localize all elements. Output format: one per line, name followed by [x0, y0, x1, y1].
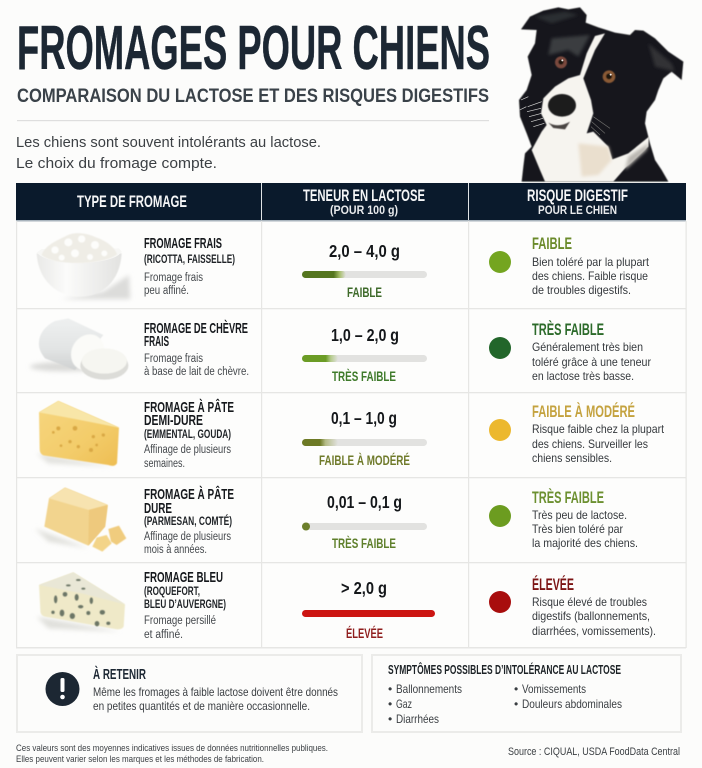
comparison table — [16, 183, 687, 648]
risk: très faible: Très bien toléré par — [532, 522, 623, 536]
lactose: 2,0-4,0 g: FAIBLE — [347, 284, 382, 300]
row: fromage de chèvre frais — [30, 318, 651, 384]
text: fromage de chèvre: FROMAGE DE CHÈVRE — [144, 320, 248, 337]
text: pâte dure: mois à années. — [144, 544, 207, 556]
row: fromage frais — [37, 233, 650, 300]
risk: élevée: Risque élevé de troubles — [532, 595, 647, 609]
risk: faible à modéré: Risque faible chez la plupart — [532, 422, 665, 436]
row: fromage bleu — [37, 569, 656, 641]
risk: très faible — [489, 488, 638, 550]
lactose: > 2,0 g — [302, 578, 435, 641]
intro text: Les chiens sont souvent intolérants au lactose. — [16, 134, 321, 151]
list: symptômes: • — [514, 697, 518, 711]
lactose: 1,0-2,0 g: 1,0 – 2,0 g — [331, 325, 399, 345]
intro text — [16, 134, 321, 172]
text: fromage frais — [144, 235, 235, 297]
risk: faible: FAIBLE — [532, 234, 572, 253]
text: fromage de chèvre: Fromage frais — [144, 353, 203, 365]
lactose: 0,01-0,1 g: TRÈS FAIBLE — [332, 535, 396, 551]
risk: faible — [489, 234, 650, 297]
footnote: Elles peuvent varier selon les marques et les méthodes de fabrication. — [16, 754, 264, 765]
risk: faible à modéré — [489, 402, 665, 465]
risk: très faible: TRÈS FAIBLE — [532, 320, 604, 339]
image: hard cheese block with crumbs — [35, 488, 126, 552]
list: symptômes — [388, 682, 622, 726]
lactose: 0,1-1,0 g — [302, 408, 427, 468]
risk: élevée: diarrhées, vomissements). — [532, 624, 656, 638]
risk: élevée: ÉLEVÉE — [532, 575, 574, 594]
image: goat cheese log — [30, 318, 128, 380]
risk: faible: des chiens. Faible risque — [532, 269, 648, 283]
text: fromage de chèvre — [144, 320, 249, 378]
table header: risque digestif: RISQUE DIGESTIF — [527, 186, 628, 205]
list: symptômes: Vomissements — [522, 682, 586, 696]
subtitle: COMPARAISON DU LACTOSE ET DES RISQUES DIGESTIFS — [17, 86, 489, 107]
image: bowl of fresh cheese — [37, 233, 130, 299]
panel: à retenir — [17, 655, 362, 732]
text: pâte demi-dure: DEMI-DURE — [144, 412, 203, 429]
risk: faible: de troubles digestifs. — [532, 283, 631, 297]
illustration: border collie dog — [519, 7, 683, 182]
footnote: Ces valeurs sont des moyennes indicatives issues de données nutritionnelles publiques. — [16, 743, 328, 754]
text: pâte dure: Affinage de plusieurs — [144, 531, 231, 543]
risk: très faible: Généralement très bien — [532, 340, 643, 354]
table header: teneur en lactose: TENEUR EN LACTOSE — [303, 186, 425, 205]
text: fromage bleu: (ROQUEFORT, — [144, 586, 200, 598]
text: fromage frais: peu affiné. — [144, 285, 189, 297]
risk: faible à modéré: FAIBLE À MODÉRÉ — [532, 402, 635, 421]
risk: très faible: Très peu de lactose. — [532, 508, 627, 522]
lactose: 0,1-1,0 g: 0,1 – 1,0 g — [331, 408, 397, 428]
lactose: 0,01-0,1 g: 0,01 – 0,1 g — [327, 492, 402, 512]
eyes — [555, 56, 615, 83]
lactose: 1,0-2,0 g — [302, 325, 427, 384]
lactose: 1,0-2,0 g: TRÈS FAIBLE — [332, 368, 396, 384]
list: symptômes: • — [514, 682, 518, 696]
text: fromage bleu: BLEU D’AUVERGNE) — [144, 599, 226, 611]
text: fromage frais: (RICOTTA, FAISSELLE) — [144, 254, 235, 266]
text: pâte demi-dure: FROMAGE À PÂTE — [144, 398, 234, 416]
text: à retenir — [93, 685, 338, 713]
text: pâte dure: FROMAGE À PÂTE — [144, 485, 234, 503]
text: fromage de chèvre: à base de lait de chèvre. — [144, 366, 249, 378]
table header: risque digestif: POUR LE CHIEN — [538, 203, 617, 217]
table header: type de fromage: TYPE DE FROMAGE — [77, 192, 187, 211]
risk: faible à modéré: chiens sensibles. — [532, 451, 612, 465]
text: pâte demi-dure — [144, 398, 234, 470]
list: symptômes: Diarrhées — [396, 712, 439, 726]
list: symptômes: Gaz — [396, 697, 412, 711]
text: pâte dure: DURE — [144, 500, 172, 517]
lactose: 2,0-4,0 g — [302, 241, 427, 300]
table header: teneur en lactose: (POUR 100 g) — [330, 203, 398, 217]
lactose: > 2,0 g: ÉLEVÉE — [346, 625, 383, 641]
risk: faible à modéré: des chiens. Surveiller les — [532, 437, 648, 451]
list: symptômes: • — [388, 712, 392, 726]
table header: risque digestif — [527, 186, 628, 217]
text: pâte dure — [144, 485, 234, 556]
panel: symptômes — [372, 655, 681, 732]
intro text: Le choix du fromage compte. — [16, 155, 217, 172]
risk: élevée: digestifs (ballonnements, — [532, 609, 650, 623]
text: fromage bleu: et affiné. — [144, 629, 183, 641]
lactose: 0,01-0,1 g — [302, 492, 427, 551]
text: pâte demi-dure: (EMMENTAL, GOUDA) — [144, 429, 231, 441]
risk: élevée — [489, 575, 656, 638]
text: fromage frais: Fromage frais — [144, 272, 203, 284]
list: symptômes: Douleurs abdominales — [522, 697, 622, 711]
nose — [548, 94, 576, 117]
image: blue cheese wedge — [37, 572, 125, 632]
risk: très faible: la majorité des chiens. — [532, 536, 638, 550]
text: fromage bleu: FROMAGE BLEU — [144, 569, 223, 586]
lactose: > 2,0 g: > 2,0 g — [341, 578, 387, 598]
risk: faible: Bien toléré par la plupart — [532, 255, 650, 269]
list: symptômes: • — [388, 697, 392, 711]
risk: très faible: TRÈS FAIBLE — [532, 488, 604, 507]
risk: très faible — [489, 320, 651, 383]
text: pâte demi-dure: Affinage de plusieurs — [144, 444, 231, 456]
text: fromage frais: FROMAGE FRAIS — [144, 235, 222, 252]
icon: exclamation mark — [46, 672, 80, 706]
row: fromage à pâte demi-dure — [37, 398, 665, 470]
risk: très faible: en lactose très basse. — [532, 369, 634, 383]
lactose: 2,0-4,0 g: 2,0 – 4,0 g — [329, 241, 400, 261]
risk: très faible: toléré grâce à une teneur — [532, 355, 651, 369]
image: semi-hard cheese wedge — [37, 401, 119, 467]
text: fromage bleu — [144, 569, 226, 641]
list: symptômes: • — [388, 682, 392, 696]
text: fromage bleu: Fromage persillé — [144, 615, 216, 627]
heading: à retenir: À RETENIR — [93, 666, 146, 683]
text: fromage de chèvre: FRAIS — [144, 333, 169, 350]
list: symptômes: Ballonnements — [396, 682, 462, 696]
lactose: 0,1-1,0 g: FAIBLE À MODÉRÉ — [319, 452, 410, 468]
text: pâte demi-dure: semaines. — [144, 458, 185, 470]
text: pâte dure: (PARMESAN, COMTÉ) — [144, 515, 232, 528]
row: fromage à pâte dure — [35, 485, 638, 556]
text: à retenir: en petites quantités et de manière occasionnelle. — [93, 699, 310, 713]
table header: teneur en lactose — [303, 186, 425, 217]
footnote — [16, 743, 328, 765]
text: à retenir: Même les fromages à faible lactose doivent être donnés — [93, 685, 338, 699]
